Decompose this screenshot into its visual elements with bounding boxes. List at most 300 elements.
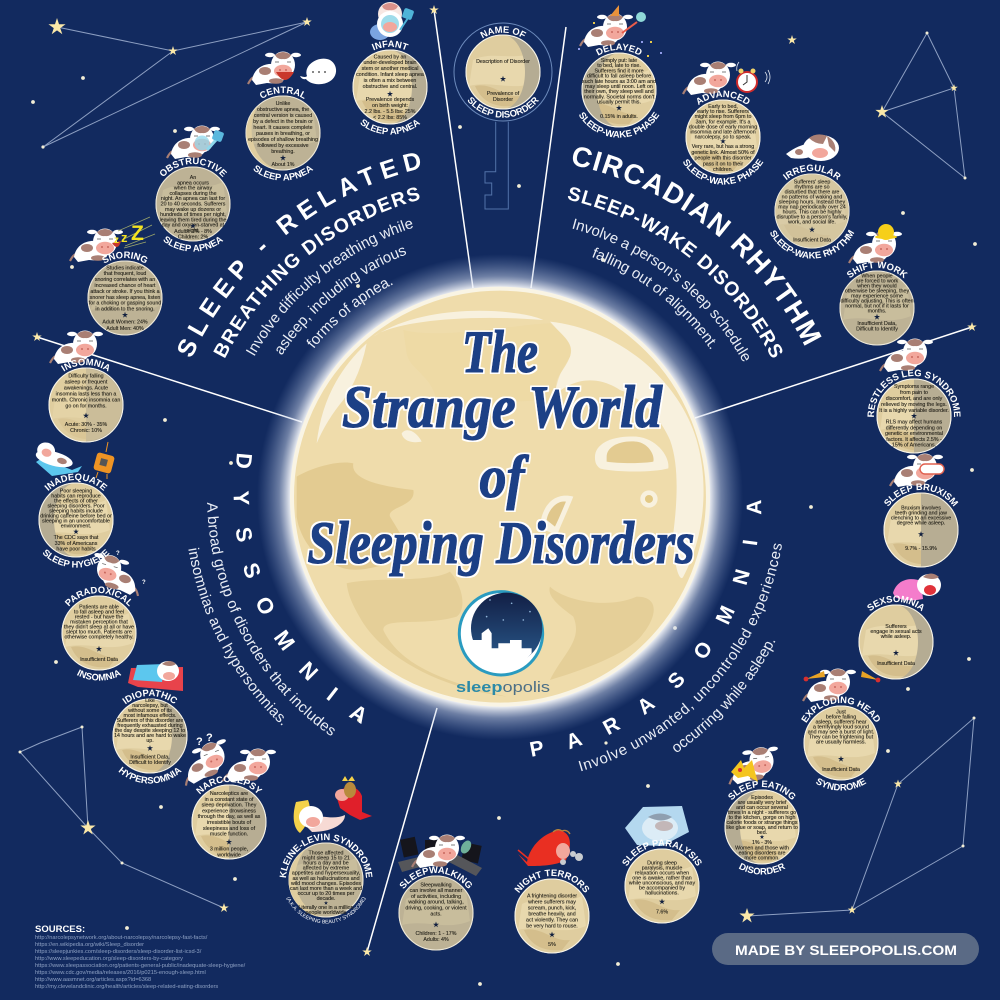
panel: obstructive sleep apnea: apnea occurs (177, 180, 209, 186)
description: sleep-related: Involve difficulty breathing while (246, 220, 413, 356)
panel: kleine-levin syndrome: as well as hallucinations and (292, 876, 360, 882)
panel: advanced sleep-wake phase (682, 62, 770, 185)
panel: irregular sleep-wake rhythm: sleeping hours. Instead they (779, 199, 845, 205)
panel: narcolepsy: sleep deprivation. They (202, 803, 257, 809)
panel: exploding head syndrome: Just (836, 710, 846, 716)
panel: delayed sleep-wake phase: difficult to fall asleep before (587, 74, 651, 80)
panel: sleep paralysis: 7.6% (656, 910, 668, 916)
panel: exploding head syndrome: They can be frightening but (809, 735, 874, 741)
sources: https://www.sleepassociation.org/patients-general-public/inadequate-sleep-hygiene/ (35, 963, 246, 969)
panel: kleine-levin syndrome: hours a day and be (303, 860, 349, 866)
panel: inadequate sleep hygiene (36, 442, 114, 568)
panel: irregular sleep-wake rhythm: hours. This can be highly (783, 209, 842, 215)
icon: cow with hard hat (849, 224, 902, 264)
panel: kleine-levin syndrome: occur up to 20 times per (298, 891, 355, 897)
heading: circadian rhythm sleep-wake disorders: SLEEP-WAKE DISORDERS (568, 187, 782, 358)
panel: delayed sleep-wake phase: normally. Societal norms don't (584, 94, 655, 100)
panel: paradoxical insomnia: Patients are able (79, 605, 119, 611)
panel: advanced sleep-wake phase: Early to bed, (708, 104, 738, 110)
panel: sleepwalking: SLEEPWALKING (397, 864, 475, 891)
panel: delayed sleep-wake phase (578, 5, 662, 138)
panel: kleine-levin syndrome: Those affected (309, 850, 344, 856)
sources: https://en.wikipedia.org/wiki/Sleep_disorder (35, 942, 144, 948)
panel: idiopathic hypersomnia: HYPERSOMNIA (117, 764, 183, 786)
panel: shift work: Difficult to Identify (856, 327, 898, 333)
icon: party cow with hat and confetti (578, 5, 662, 57)
panel: sleep bruxism (883, 454, 959, 568)
panel: sleep paralysis (622, 806, 702, 924)
panel: paradoxical insomnia: INSOMNIA (76, 667, 123, 683)
panel: sleepwalking: of activities, including (411, 894, 461, 900)
heading: circadian rhythm sleep-wake disorders: CIRCADIAN RHYTHM (572, 147, 822, 346)
panel: kleine-levin syndrome: appetites and hypersexuality, (292, 871, 360, 877)
panel: snoring (69, 216, 163, 336)
panel: infant sleep apnea: under-developed brain (363, 60, 417, 66)
description: circadian: falling out of alignment. (592, 248, 716, 350)
icon: snoring cow with zzz: Z (131, 222, 144, 245)
panel: delayed sleep-wake phase: to bed, late to rise. (597, 63, 641, 69)
panel: restless leg syndrome: genetic or environmental (885, 431, 943, 437)
panel: snoring: Adult Men: 40% (106, 326, 144, 332)
panel: restless leg syndrome: Symptoms range (894, 384, 934, 390)
panel: snoring: Adult Women: 24% (102, 320, 148, 326)
panel: obstructive sleep apnea: day and oxygen-starved at (162, 223, 225, 229)
panel: advanced sleep-wake phase: children. (713, 167, 733, 173)
icon: cow with horns blowing (803, 668, 880, 702)
panel: idiopathic hypersomnia: the day despite sleeping 12 to (115, 728, 185, 734)
heading: dyssomnia (188, 454, 364, 736)
badge: made by sleepopolis (712, 933, 979, 965)
icon: snoring cow with zzz: z (121, 230, 128, 245)
key legend: Prevalence of (487, 91, 520, 97)
panel: sleep paralysis: be accompanied by (639, 885, 685, 891)
panel: narcolepsy: 3 million people, (210, 847, 248, 853)
panel: night terrors: breathe heavily, and (528, 912, 576, 918)
panel: irregular sleep-wake rhythm: work, and social life. (788, 219, 836, 225)
panel: exploding head syndrome: EXPLODING HEAD (801, 696, 880, 723)
panel: restless leg syndrome: from pain to (900, 390, 928, 396)
panel: delayed sleep-wake phase: usually permit this. (597, 100, 641, 106)
panel: infant sleep apnea: on birth weight: (372, 103, 408, 109)
panel: sleepwalking: Sleepwalking (420, 882, 452, 888)
panel: narcolepsy: experience drowsiness (202, 808, 256, 814)
panel: restless leg syndrome: relieved by moving the legs. (881, 402, 947, 408)
panel: inadequate sleep hygiene: The CDC says that (54, 535, 99, 541)
panel: sleep paralysis: one is awake, rather than (632, 875, 692, 881)
panel: inadequate sleep hygiene: habits can reproduce (51, 493, 101, 499)
panel: central sleep apnea: episodes of shallow breathing (248, 137, 318, 143)
panel: shift work: SHIFT WORK (847, 261, 908, 278)
panel: restless leg syndrome: RESTLESS LEG SYNDROME (867, 370, 961, 417)
panel: narcolepsy: through the day, as well as (198, 814, 261, 820)
panel: paradoxical insomnia: mistaken perception that (70, 620, 128, 626)
panel: advanced sleep-wake phase: insomnia and late afternoon (690, 130, 756, 136)
panel: delayed sleep-wake phase: Simply put: late (601, 58, 637, 64)
panel: sleepwalking: acts. (430, 911, 442, 917)
panel: restless leg syndrome: differently depending on (886, 425, 942, 431)
sources: http://www.aasmnet.org/articles.aspx?id=6368 (35, 977, 151, 983)
panel: night terrors: 5% (548, 942, 556, 948)
panel: insomnia: Acute: 30% - 35% (65, 422, 107, 428)
panel: exploding head syndrome: and may see a burst of light. (808, 730, 874, 736)
sources (35, 924, 246, 990)
panel: advanced sleep-wake phase: ADVANCED (697, 90, 750, 106)
panel: irregular sleep-wake rhythm: Sufferers' sleep (794, 179, 830, 185)
panel: infant sleep apnea: stem or another medical (362, 66, 418, 72)
icon: blonde cow and red bull (294, 776, 372, 833)
panel: kleine-levin syndrome: decade. (317, 896, 335, 902)
panel: inadequate sleep hygiene: have poor habits (56, 547, 96, 553)
panel: shift work: normal, but not if it lasts for (845, 304, 909, 310)
heading: dyssomnia: DYSSOMNIA (234, 454, 364, 724)
panel: advanced sleep-wake phase: might sleep from 6pm to (695, 114, 751, 120)
panel: inadequate sleep hygiene: environment. (61, 523, 91, 529)
description: sleep-related: forms of apnea. (306, 280, 393, 348)
panel: advanced sleep-wake phase: pass it on to their (703, 161, 743, 167)
panel: sleepwalking: driving, cooking, or violent (405, 906, 467, 912)
panel: night terrors: act violently. They can (526, 918, 578, 924)
panel: sleep paralysis: while unconscious, and may (629, 880, 695, 886)
panel: central sleep apnea: pauses in breathing, or (256, 131, 310, 137)
sources: http://narcolepsynetwork.org/about-narcolepsy/narcolepsy-fast-facts/ (35, 935, 208, 941)
panel: snoring: snorer has sleep apnea, listen (90, 295, 160, 301)
panel: shift work: may experience some (851, 294, 903, 300)
icon: two sleeping cows: ? (196, 736, 203, 748)
key legend: Disorder (493, 97, 513, 103)
panel: idiopathic hypersomnia: without some of its (128, 708, 172, 714)
heading: parasomnia: PARASOMNIA (530, 500, 762, 757)
icon: cow eating (725, 745, 782, 785)
panel: snoring: increased chance of heart (95, 283, 156, 289)
panel: sleep eating disorder: more common. (744, 855, 780, 861)
panel: obstructive sleep apnea: night. An apnea can last for (161, 196, 225, 202)
panel: inadequate sleep hygiene: SLEEP HYGIENE (41, 547, 111, 570)
icon: cow with question marks: ? (142, 580, 146, 586)
panel: snoring: attack or stroke. If you think a (90, 289, 160, 295)
panel: paradoxical insomnia: PARADOXICAL (62, 584, 136, 608)
panel: infant sleep apnea: Prevalence depends (366, 97, 414, 103)
panel: narcolepsy: worldwide (217, 852, 241, 858)
icon: cow (50, 330, 103, 364)
panel: narcolepsy (184, 732, 276, 860)
panel: delayed sleep-wake phase: Sufferers find it more (594, 68, 644, 74)
title: Sleeping Disorders (308, 510, 694, 576)
heading: sleep-related breathing disorders: SLEEP - RELATED (178, 153, 420, 357)
icon: snoring cow with zzz (70, 217, 155, 262)
panel: night terrors: NIGHT TERRORS (514, 870, 590, 893)
moon (292, 289, 708, 705)
panel: irregular sleep-wake rhythm: rhythms are so (794, 184, 830, 190)
panel: snoring: for a choking or gasping sound (89, 301, 161, 307)
panel: irregular sleep-wake rhythm: may nap periodically over 24 (778, 204, 846, 210)
panel: obstructive sleep apnea: may wake up dozens or (165, 207, 221, 213)
panel: sleepwalking: walking around, talking, (408, 900, 464, 906)
icon: cow (880, 338, 933, 372)
panel: obstructive sleep apnea: An (190, 175, 196, 181)
moon glow (257, 254, 743, 740)
panel: sleep eating disorder: eating disorders are (739, 850, 785, 856)
panel: idiopathic hypersomnia: Difficult to Identify (129, 760, 171, 766)
title: Strange World (342, 374, 663, 440)
panel: shift work: months. (868, 309, 886, 315)
panel: sleep eating disorder: Women and those with (735, 845, 789, 851)
key legend: NAME OF (480, 26, 526, 38)
title (308, 319, 694, 576)
panel: exploding head syndrome: asleep, sufferers hear (815, 720, 867, 726)
panel: central sleep apnea: heart. It causes complete (253, 125, 313, 131)
panel: sleep eating disorder: 1% - 3% (752, 840, 772, 846)
panel: sleep eating disorder: Episodes (751, 795, 773, 801)
panel: inadequate sleep hygiene: sleeping in an uncomfortable (42, 518, 110, 524)
key legend: SLEEP DISORDER (468, 97, 539, 118)
panel: sleep bruxism: Bruxism involves (901, 506, 941, 512)
panel: central sleep apnea: obstructive apnea, the (257, 107, 309, 113)
icon: red bull snorting (518, 830, 583, 866)
panel: sleep bruxism: degree while asleep. (897, 521, 945, 527)
panel: kleine-levin syndrome: might sleep 15 to 21 (302, 855, 350, 861)
panel: sleep paralysis: paralysis, muscle (642, 865, 682, 871)
panel: delayed sleep-wake phase: 0.15% in adults. (600, 114, 638, 120)
panel: paradoxical insomnia: slept too much. Patients are (66, 630, 132, 636)
description: dyssomnia: A broad group of disorders that includes (207, 502, 335, 736)
panel: infant sleep apnea: Caused by an (374, 54, 406, 60)
panel: central sleep apnea: CENTRAL (260, 86, 304, 99)
panel: advanced sleep-wake phase: double dose of early morning (689, 124, 757, 130)
sources: https://www.cdc.gov/media/releases/2016/p0215-enough-sleep.html (35, 970, 206, 976)
panel: inadequate sleep hygiene: drinking caffeine before bed or (40, 513, 112, 519)
panel: obstructive sleep apnea: night. (187, 228, 199, 234)
panel: infant sleep apnea: condition. Infant sleep apnea (356, 72, 424, 78)
sources: http://www.sleepeducation.org/sleep-disorders-by-category (35, 956, 183, 962)
panel: central sleep apnea: central version is caused (254, 113, 312, 119)
panel: delayed sleep-wake phase: SLEEP-WAKE PHASE (579, 112, 660, 138)
icon: cow on lounger with tv (34, 440, 115, 479)
panel: exploding head syndrome: before falling (826, 715, 856, 721)
panel: idiopathic hypersomnia (112, 661, 188, 784)
panel: idiopathic hypersomnia: 14 hours and are hard to wake (114, 733, 186, 739)
panel: sexsomnia: SEXSOMNIA (867, 596, 924, 612)
sources: http://my.clevelandclinic.org/health/articles/sleep-related-eating-disorders (35, 984, 218, 990)
panel: obstructive sleep apnea: when the airway (174, 186, 212, 192)
panel: kleine-levin syndrome: can last more than a week and (290, 886, 362, 892)
panel: night terrors (514, 829, 590, 954)
icon: cow in ice block (625, 806, 689, 846)
panel: sleepwalking (398, 834, 482, 950)
panel: kleine-levin syndrome: (A.K.A. SLEEPING BEAUTY SYNDROME) (285, 896, 368, 926)
panel: narcolepsy: sleepiness and loss of (203, 826, 256, 832)
panel: idiopathic hypersomnia: Like (145, 698, 155, 704)
panel: shift work: otherwise be sleeping, they (845, 289, 909, 295)
panel: snoring: Studies indicate (106, 265, 144, 271)
title: of (480, 444, 529, 510)
icon: cow with question marks: ? (116, 551, 120, 557)
panel: obstructive sleep apnea: Children: 2% (178, 234, 208, 240)
panel: paradoxical insomnia: rested - but have the (75, 615, 123, 621)
panel: sleepwalking: can involve all manner (410, 888, 463, 894)
panel: sleep paralysis: hallucinations. (645, 890, 679, 896)
panel: advanced sleep-wake phase: people with this disorder (694, 156, 752, 162)
panel: infant sleep apnea: < 2.2 lbs: 85% (373, 115, 407, 121)
panel: irregular sleep-wake rhythm: SLEEP-WAKE RHYTHM (770, 230, 854, 258)
panel: idiopathic hypersomnia: narcolepsy, but (132, 703, 168, 709)
panel: sexsomnia: while asleep. (881, 634, 911, 640)
panel: restless leg syndrome: RLS may affect humans (886, 420, 943, 426)
panel: sleep paralysis: SLEEP PARALYSIS (622, 840, 702, 866)
panel: inadequate sleep hygiene: the effects of other (54, 498, 98, 504)
panel: idiopathic hypersomnia: Sufferers of this disorder are (117, 718, 183, 724)
panel: snoring: SNORING (102, 252, 148, 263)
heading: sleep-related breathing disorders: BREATHING DISORDERS (213, 188, 420, 358)
panel: restless leg syndrome (867, 338, 961, 454)
panel: paradoxical insomnia: Insufficient Data (80, 657, 118, 663)
panel: sleep eating disorder: to the kitchen, gorge on high (729, 815, 795, 821)
panel: obstructive sleep apnea (155, 126, 231, 252)
panel: snoring: that frequent, loud (104, 271, 146, 277)
panel: irregular sleep-wake rhythm (770, 134, 854, 258)
panel: sleep eating disorder: DISORDER (738, 862, 786, 875)
panel: exploding head syndrome: a terrifyingly loud sound (813, 725, 869, 731)
panel: shift work: When people (861, 274, 893, 280)
panel: snoring: in addition to the snoring. (95, 307, 155, 313)
panel: exploding head syndrome: Insufficient Data (822, 767, 860, 773)
panel: night terrors: A frightening disorder (527, 894, 577, 900)
panel: infant sleep apnea: is often a mix between (364, 78, 416, 84)
panel: inadequate sleep hygiene: INADEQUATE (42, 471, 110, 493)
panel: delayed sleep-wake phase: may sleep until noon. Left on (585, 84, 653, 90)
panel: delayed sleep-wake phase: DELAYED (596, 44, 642, 56)
panel: sleep paralysis: During sleep (647, 860, 677, 866)
panel: advanced sleep-wake phase: narcolepsy, so to speak. (695, 135, 751, 141)
panel: sexsomnia: Insufficient Data (877, 661, 915, 667)
panel: sleepwalking: Adults: 4% (423, 937, 449, 943)
icon: cow in bed under blanket (128, 661, 183, 691)
panel: sleep eating disorder (724, 746, 800, 875)
panel: obstructive sleep apnea: collapses during the (169, 191, 217, 197)
icon: cow with breathing mask (167, 126, 224, 159)
panel: idiopathic hypersomnia: most infamous effects. (124, 713, 176, 719)
panel: inadequate sleep hygiene: 33% of Americans (55, 541, 98, 547)
panel: obstructive sleep apnea: SLEEP APNEA (164, 236, 224, 252)
sources: https://sleepjunkies.com/sleep-disorders/sleep-disorder-list-icsd-3/ (35, 949, 202, 955)
panel: paradoxical insomnia: otherwise completely healthy. (64, 635, 134, 641)
panel: paradoxical insomnia: they didn't sleep at all or have (64, 625, 134, 631)
description: parasomnia: Involve unwanted, uncontrolled experiences (578, 544, 782, 772)
panel: infant sleep apnea (352, 2, 428, 135)
panel: kleine-levin syndrome: KLEINE-LEVIN SYNDROME (277, 831, 375, 879)
panel: central sleep apnea: breathing. (271, 149, 295, 155)
logo: sleepopolis: sleep opolis (456, 679, 550, 696)
panel: central sleep apnea (245, 52, 336, 181)
panel: obstructive sleep apnea: OBSTRUCTIVE (160, 158, 227, 178)
panel: advanced sleep-wake phase: Very rare, but has a strong (692, 144, 754, 150)
panel: sleep eating disorder: like glue or soap, and return to (726, 825, 798, 831)
panel: sexsomnia: Sufferers (885, 624, 907, 630)
icon: cow with alarm clock (683, 62, 770, 95)
panel: sleep bruxism: 9.7% - 15.9% (905, 546, 937, 552)
panel: idiopathic hypersomnia: up. (146, 738, 154, 744)
panel: shift work (839, 224, 915, 346)
panel: irregular sleep-wake rhythm: IRREGULAR (782, 164, 840, 180)
panel: central sleep apnea: by a defect in the brain or (253, 119, 313, 125)
panel: insomnia: month. Chronic insomnia can (52, 398, 120, 404)
panel: narcolepsy: muscle function. (210, 832, 248, 838)
panel: kleine-levin syndrome: people worldwide (306, 910, 347, 916)
panel: irregular sleep-wake rhythm: Insufficient Data (793, 238, 831, 244)
panel: sexsomnia (858, 574, 941, 680)
panel: central sleep apnea: Unlike (276, 101, 290, 107)
panel: sleep eating disorder: calorie foods or strange things (727, 820, 798, 826)
icon: cow with question marks (87, 551, 146, 597)
panel: infant sleep apnea: INFANT (372, 40, 409, 50)
logo: sleepopolis (456, 592, 550, 696)
panel: night terrors: scream, punch, kick, (528, 906, 576, 912)
panel: advanced sleep-wake phase: SLEEP-WAKE PHASE (683, 158, 764, 185)
icon: two sleeping cows: ? (206, 732, 213, 744)
panel: idiopathic hypersomnia: frequently exhausted during (117, 723, 183, 729)
panel: delayed sleep-wake phase: such late hours as 3:00 am and (582, 79, 656, 85)
panel: advanced sleep-wake phase: genetic link. Almost 50% of (691, 150, 755, 156)
panel: inadequate sleep hygiene: sleeping disorders. Poor (47, 503, 105, 509)
panel: central sleep apnea: About 1% (272, 162, 295, 168)
panel: sexsomnia: engage in sexual acts (870, 629, 922, 635)
panel: insomnia: awakenings. Acute (64, 386, 108, 392)
key legend: Description of Disorder (476, 59, 530, 65)
panel: idiopathic hypersomnia: IDIOPATHIC (120, 687, 180, 706)
panel: infant sleep apnea: 2.2 lbs. - 5.5 lbs: 25% (365, 109, 416, 115)
panel: shift work: difficulty adjusting. This is often (840, 299, 914, 305)
panel: shift work: are forced to work (856, 279, 899, 285)
panel: narcolepsy: Narcoleptics are (210, 791, 248, 797)
panel: insomnia: INSOMNIA (59, 356, 113, 373)
description: dyssomnia: insomnias and hypersomnias. (188, 548, 284, 726)
panel: narcolepsy: NARCOLEPSY (194, 773, 265, 797)
panel: insomnia: go on for months. (65, 404, 107, 410)
panel: snoring: snoring correlates with an (95, 277, 155, 283)
panel: sleep eating disorder: are usually very brief (738, 800, 787, 806)
panel: insomnia: Chronic: 10% (70, 428, 102, 434)
panel: paradoxical insomnia (61, 550, 146, 681)
description: sleep-related: asleep, including various (276, 248, 406, 354)
panel: exploding head syndrome (801, 668, 880, 791)
icon: snoring cow with zzz: z (114, 235, 119, 246)
panel: inadequate sleep hygiene: sleeping habits include (49, 508, 103, 514)
panel: sleep eating disorder: times in a night - sufferers go (728, 810, 796, 816)
panel: irregular sleep-wake rhythm: disruptive to a person's family, (777, 214, 847, 220)
icon: lying cow (786, 134, 839, 161)
panel: restless leg syndrome: It is a highly variable disorder. (879, 408, 949, 414)
panel: sleep bruxism: teeth grinding and jaw (895, 511, 947, 517)
panel: night terrors: be very hard to rouse. (526, 924, 578, 930)
panel: kleine-levin syndrome (280, 776, 372, 924)
panel: inadequate sleep hygiene: Poor sleeping (60, 488, 92, 494)
panel: infant sleep apnea: obstructive and central. (363, 84, 417, 90)
panel: shift work: Insufficient Data, (857, 321, 897, 327)
panel: insomnia: asleep or frequent (65, 380, 108, 386)
title: The (462, 319, 538, 385)
icon: cow in pink outfit (893, 574, 941, 600)
panel: narcolepsy: in a constant state of (205, 797, 254, 803)
sources: SOURCES: (35, 924, 85, 935)
panel: restless leg syndrome: factors. It affects 2.5% - (886, 437, 942, 443)
panel: central sleep apnea: followed by excessive (257, 143, 309, 149)
icon: cow with speech bubble (248, 52, 336, 85)
description: parasomnia: occurring while asleep. (673, 640, 776, 752)
panel: kleine-levin syndrome: wild mood changes. Episodes (291, 881, 361, 887)
panel: irregular sleep-wake rhythm: no patterns of waking and (782, 194, 842, 200)
panel: central sleep apnea: SLEEP APNEA (254, 165, 314, 181)
panel: idiopathic hypersomnia: Insufficient Data, (130, 755, 170, 761)
panel: insomnia: Difficulty falling (68, 374, 104, 380)
